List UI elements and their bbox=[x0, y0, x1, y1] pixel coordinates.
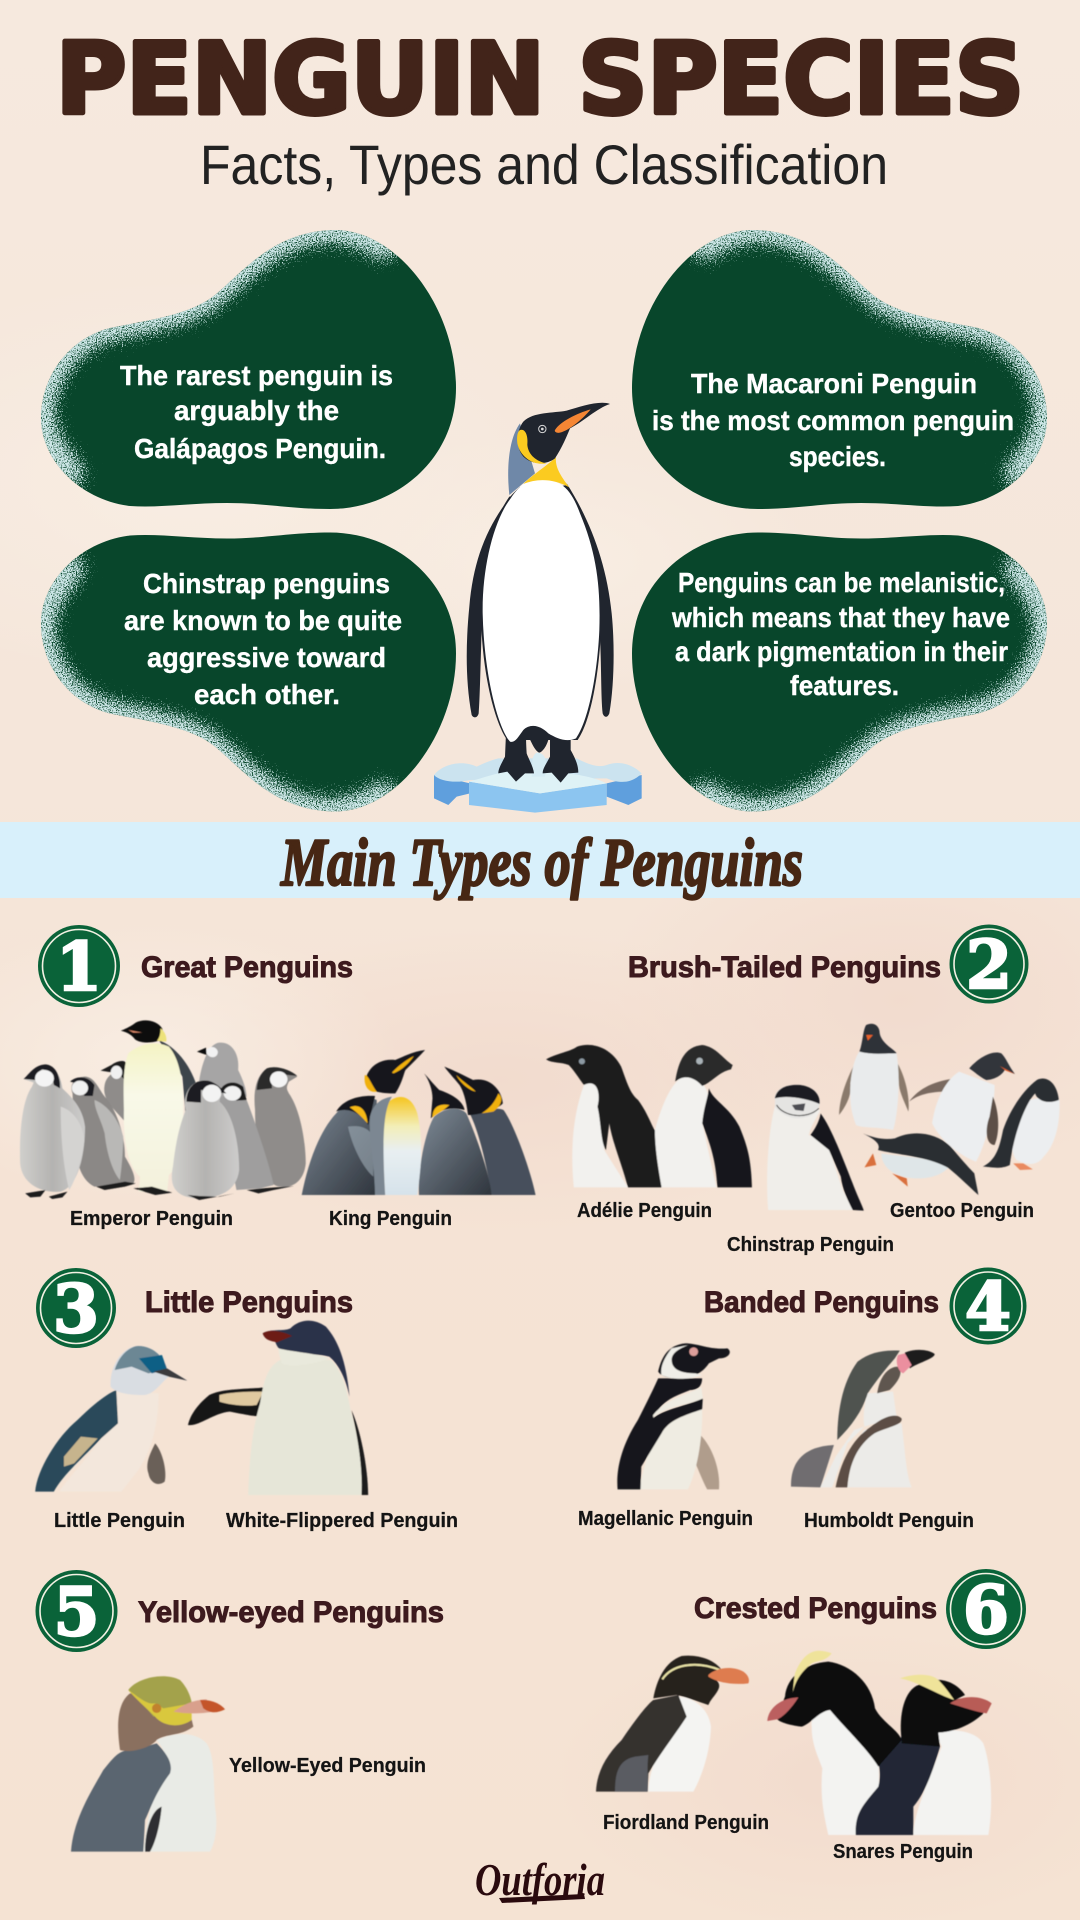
banner bbox=[0, 822, 1080, 898]
fact text: The rarest penguin is bbox=[120, 360, 393, 391]
fact text: arguably the bbox=[174, 395, 339, 426]
blob bbox=[38, 532, 456, 814]
fact text bbox=[124, 568, 402, 710]
photo: emperor penguins bbox=[20, 1020, 306, 1200]
penguin body bbox=[467, 423, 614, 783]
fact text: species. bbox=[789, 441, 886, 472]
label: White-Flippered Penguin: White-Flippered Penguin bbox=[226, 1510, 458, 1532]
fact text: aggressive toward bbox=[147, 642, 386, 673]
fact text: features. bbox=[790, 670, 899, 701]
ice floe bbox=[434, 753, 642, 813]
blob bbox=[632, 532, 1050, 814]
panel: macaroni penguin fact bbox=[632, 227, 1050, 509]
section 4: Banded Penguins bbox=[578, 1268, 1026, 1532]
fact text: each other. bbox=[194, 679, 340, 710]
photo: chinstrap penguin bbox=[767, 1085, 864, 1211]
blob bbox=[632, 227, 1050, 509]
photo: king penguins bbox=[302, 1050, 536, 1195]
heading: Little Penguins bbox=[145, 1286, 353, 1319]
section 1: Great Penguins bbox=[20, 925, 536, 1230]
fact text bbox=[652, 368, 1014, 472]
fact text: Penguins can be melanistic, bbox=[678, 567, 1005, 598]
label: Chinstrap Penguin: Chinstrap Penguin bbox=[727, 1234, 894, 1256]
fact text: is the most common penguin bbox=[652, 405, 1014, 436]
fact text: The Macaroni Penguin bbox=[691, 368, 977, 399]
badge 5: 5 bbox=[54, 1573, 99, 1651]
blob bbox=[38, 227, 456, 509]
heading: Great Penguins bbox=[141, 951, 353, 984]
photo: Snares penguins bbox=[767, 1651, 992, 1835]
subtitle: Facts, Types and Classification bbox=[200, 133, 888, 196]
section heading: Main Types of Penguins bbox=[280, 824, 803, 900]
section 5: Yellow-eyed Penguins bbox=[36, 1570, 444, 1852]
fact text: are known to be quite bbox=[124, 605, 402, 636]
section 3: Little Penguins bbox=[35, 1268, 458, 1532]
section 2: Brush-Tailed Penguins bbox=[546, 924, 1060, 1256]
heading: Crested Penguins bbox=[694, 1592, 937, 1625]
fact text: Chinstrap penguins bbox=[143, 568, 390, 599]
photo: Humboldt penguin bbox=[791, 1350, 935, 1487]
heading: Yellow-eyed Penguins bbox=[138, 1596, 444, 1629]
label: Humboldt Penguin: Humboldt Penguin bbox=[804, 1510, 974, 1532]
section 6: Crested Penguins bbox=[596, 1569, 1026, 1863]
penguin head bbox=[517, 403, 610, 464]
panel: melanistic fact bbox=[632, 532, 1050, 814]
illustration: king penguin on ice bbox=[434, 403, 642, 813]
badge 3: 3 bbox=[53, 1270, 99, 1348]
fact text bbox=[120, 360, 393, 464]
heading: Banded Penguins bbox=[704, 1286, 939, 1319]
logo: Outforia: Outforia bbox=[475, 1854, 605, 1905]
panel: chinstrap fact bbox=[38, 532, 456, 814]
label: Snares Penguin: Snares Penguin bbox=[833, 1841, 973, 1863]
badge 2: 2 bbox=[966, 926, 1012, 1004]
badge 4 bbox=[950, 1268, 1026, 1346]
label: Little Penguin: Little Penguin bbox=[54, 1510, 185, 1532]
photo: Adélie penguins bbox=[546, 1045, 752, 1187]
badge 6: 6 bbox=[963, 1571, 1009, 1649]
badge 1: 1 bbox=[56, 928, 102, 1006]
label: Magellanic Penguin: Magellanic Penguin bbox=[578, 1508, 753, 1530]
badge 5 bbox=[36, 1570, 118, 1652]
label: King Penguin: King Penguin bbox=[329, 1208, 452, 1230]
label: Gentoo Penguin: Gentoo Penguin bbox=[890, 1200, 1034, 1222]
photo: Magellanic penguin bbox=[617, 1343, 730, 1489]
panel: rarest penguin fact bbox=[38, 227, 456, 509]
label: Fiordland Penguin: Fiordland Penguin bbox=[603, 1812, 769, 1834]
badge 4: 4 bbox=[965, 1268, 1011, 1346]
badge 6 bbox=[946, 1569, 1026, 1649]
fact text bbox=[671, 567, 1010, 701]
badge 1 bbox=[38, 925, 120, 1007]
photo: white-flippered penguin bbox=[188, 1321, 368, 1495]
title: PENGUIN SPECIES bbox=[56, 23, 1024, 137]
photo: Fiordland penguin bbox=[596, 1656, 749, 1792]
fact text: a dark pigmentation in their bbox=[675, 636, 1008, 667]
photo: gentoo penguins bbox=[839, 1024, 1060, 1195]
photo: little penguin bbox=[35, 1346, 187, 1492]
label: Emperor Penguin: Emperor Penguin bbox=[70, 1208, 233, 1230]
photo: yellow-eyed penguin bbox=[71, 1676, 225, 1852]
badge 2 bbox=[950, 924, 1028, 1004]
fact text: which means that they have bbox=[671, 602, 1010, 633]
heading: Brush-Tailed Penguins bbox=[628, 951, 941, 984]
label: Adélie Penguin: Adélie Penguin bbox=[577, 1200, 712, 1222]
badge 3 bbox=[36, 1268, 116, 1348]
label: Yellow-Eyed Penguin: Yellow-Eyed Penguin bbox=[229, 1755, 426, 1777]
fact text: Galápagos Penguin. bbox=[134, 433, 386, 464]
